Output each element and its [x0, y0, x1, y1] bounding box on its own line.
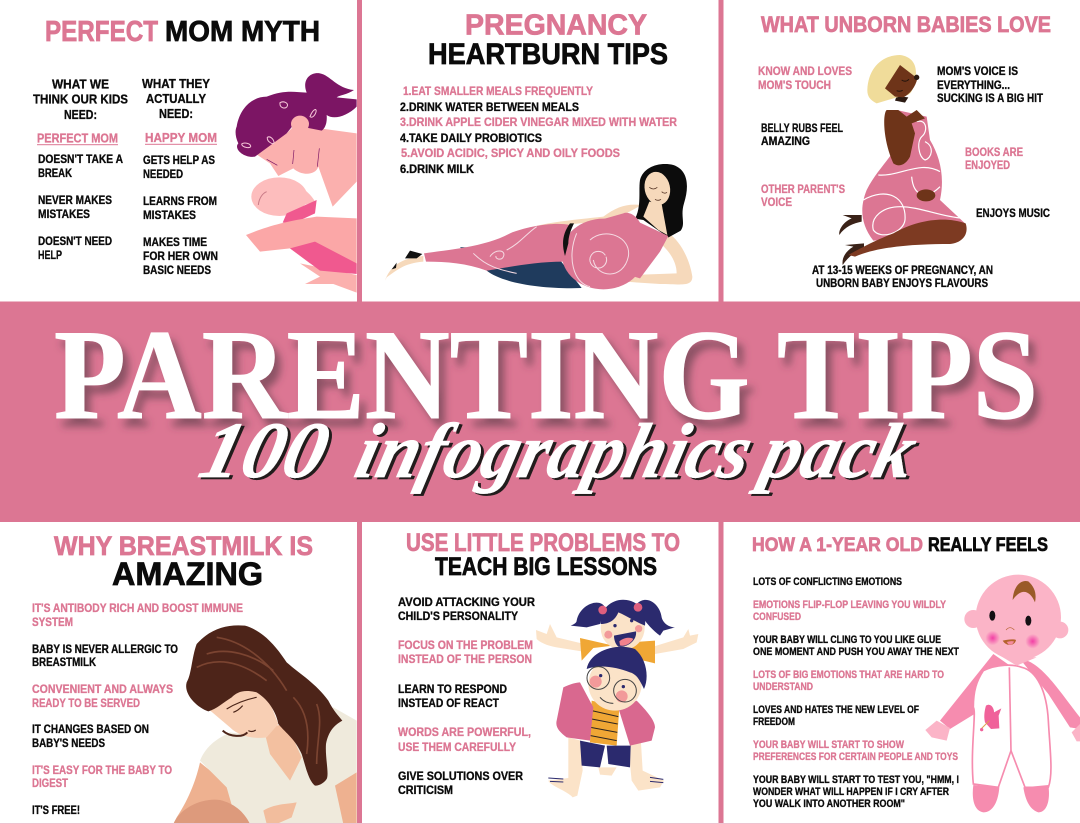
column heading: what we think: WHAT WE: [52, 76, 109, 92]
feeling: flip-flop: EMOTIONS FLIP-FLOP LEAVING YOU WILDLY: [753, 599, 946, 611]
list: happy mom traits: [143, 153, 218, 277]
illustration: baby in pink onesie: [925, 575, 1080, 812]
list: perfect mom traits: DOESN'T TAKE A: [38, 152, 123, 166]
heading: how a 1-year old really feels: [752, 534, 1048, 556]
tip: avoid attacking: CHILD'S PERSONALITY: [398, 609, 518, 623]
benefit: convenient: [32, 682, 173, 710]
feeling: freedom: FREEDOM: [753, 716, 795, 728]
heading: use little problems: [406, 529, 680, 581]
benefit: antibody rich: IT'S ANTIBODY RICH AND BOOST IMMUNE: [32, 601, 243, 615]
benefit: changes with needs: BABY'S NEEDS: [32, 736, 105, 750]
banner subtitle: pack: [748, 408, 925, 495]
benefit: easy to digest: [32, 763, 172, 790]
benefit: never allergic: BABY IS NEVER ALLERGIC TO: [32, 642, 178, 656]
feeling: flip-flop: CONFUSED: [753, 611, 801, 623]
tip: respond not react: INSTEAD OF REACT: [398, 696, 500, 710]
note: mom's touch: MOM'S TOUCH: [758, 78, 831, 92]
list: happy mom traits: NEEDED: [143, 167, 183, 181]
column heading: what we think: THINK OUR KIDS: [33, 92, 128, 106]
benefit: convenient: CONVENIENT AND ALWAYS: [32, 682, 173, 696]
note: mom's touch: [758, 64, 852, 92]
feeling: testing: YOU WALK INTO ANOTHER ROOM": [753, 798, 905, 810]
column heading: what they need: ACTUALLY: [146, 91, 206, 106]
note: flavours: [812, 263, 993, 290]
list: happy mom traits: MISTAKES: [143, 208, 196, 222]
banner subtitle: infographics: [348, 408, 761, 495]
list: happy mom traits: GETS HELP AS: [143, 153, 215, 167]
numbered tips list: 1.EAT SMALLER MEALS FREQUENTLY: [403, 84, 593, 98]
heading: how a 1-year old really feels: HOW A 1-YEAR OLD: [752, 534, 923, 556]
tip: solutions over criticism: GIVE SOLUTIONS OVER: [398, 769, 523, 783]
list: happy mom traits: MAKES TIME: [143, 235, 207, 249]
tip: words are powerful: WORDS ARE POWERFUL,: [398, 725, 531, 739]
feeling: preferences: YOUR BABY WILL START TO SHOW: [753, 739, 904, 751]
column heading: what they need: NEED:: [159, 106, 193, 121]
list: perfect mom traits: [38, 152, 123, 262]
note: other parent's voice: VOICE: [761, 195, 792, 209]
feeling: conflicting emotions: LOTS OF CONFLICTING EMOTIONS: [753, 576, 902, 588]
numbered tips list: 6.DRINK MILK: [400, 162, 474, 176]
feeling: cling like glue: [753, 634, 959, 658]
heading: how a 1-year old really feels: REALLY FEELS: [928, 534, 1048, 556]
feeling: big emotions: LOTS OF BIG EMOTIONS THAT ARE HARD TO: [753, 669, 944, 681]
feeling: preferences: PREFERENCES FOR CERTAIN PEOPLE AND TOYS: [753, 751, 958, 763]
column heading: what we think: NEED:: [64, 107, 97, 122]
heading: why breastmilk is amazing: [54, 531, 313, 592]
list: perfect mom traits: BREAK: [38, 166, 72, 180]
heading: why breastmilk is amazing: WHY BREASTMILK IS: [54, 531, 313, 561]
feeling: cling like glue: ONE MOMENT AND PUSH YOU AWAY THE NEXT: [753, 646, 959, 658]
benefit: free: IT'S FREE!: [32, 803, 80, 817]
panel: pregnancy heartburn tips: [362, 0, 718, 301]
heading: use little problems: TEACH BIG LESSONS: [435, 553, 657, 581]
heading: why breastmilk is amazing: AMAZING: [112, 556, 263, 592]
numbered tips list: 5.AVOID ACIDIC, SPICY AND OILY FOODS: [401, 146, 620, 160]
benefit: changes with needs: [32, 722, 149, 750]
note: flavours: AT 13-15 WEEKS OF PREGNANCY, AN: [812, 263, 993, 277]
list: perfect mom traits: MISTAKES: [38, 207, 90, 221]
note: mom's voice: MOM'S VOICE IS: [937, 64, 1018, 78]
panel: why breastmilk is amazing: [0, 522, 357, 824]
illustration: mother kissing baby: [236, 73, 357, 293]
benefit: antibody rich: [32, 601, 243, 629]
heading: pregnancy heartburn tips: [428, 10, 668, 71]
feeling: flip-flop: [753, 599, 946, 623]
note: mom's voice: EVERYTHING...: [937, 78, 1010, 92]
note: books: BOOKS ARE: [965, 145, 1023, 159]
numbered tips list: 4.TAKE DAILY PROBIOTICS: [400, 131, 542, 145]
note: belly rubs: BELLY RUBS FEEL: [761, 121, 843, 135]
feeling: big emotions: [753, 669, 944, 693]
feeling: testing: WONDER WHAT WILL HAPPEN IF I CRY AFTER: [753, 786, 949, 798]
numbered tips list: 3.DRINK APPLE CIDER VINEGAR MIXED WITH WATER: [400, 115, 677, 129]
banner subtitle: 100: [192, 406, 338, 495]
benefit: antibody rich: SYSTEM: [32, 615, 73, 629]
list: happy mom traits: BASIC NEEDS: [143, 263, 211, 277]
tip: words are powerful: [398, 725, 531, 754]
benefit: easy to digest: DIGEST: [32, 776, 69, 790]
tip: solutions over criticism: CRITICISM: [398, 783, 453, 797]
heading: perfect mom myth: MOM MYTH: [165, 16, 320, 48]
list: perfect mom traits: HELP: [38, 248, 62, 262]
illustration: mother breastfeeding: [173, 625, 357, 824]
tip: respond not react: [398, 682, 507, 710]
note: flavours: UNBORN BABY ENJOYS FLAVOURS: [816, 276, 988, 290]
feeling: big emotions: UNDERSTAND: [753, 681, 813, 693]
list: happy mom traits: FOR HER OWN: [143, 249, 218, 263]
tip: focus on the problem: FOCUS ON THE PROBLEM: [398, 638, 533, 652]
heading: pregnancy heartburn tips: HEARTBURN TIPS: [428, 38, 668, 71]
feeling: freedom: [753, 704, 919, 728]
tip: respond not react: LEARN TO RESPOND: [398, 682, 507, 696]
column heading: what we think: [33, 76, 128, 122]
note: other parent's voice: [761, 182, 845, 209]
numbered tips list: 2.DRINK WATER BETWEEN MEALS: [400, 100, 579, 114]
tip: words are powerful: USE THEM CAREFULLY: [398, 740, 516, 754]
column heading: what they need: WHAT THEY: [142, 76, 210, 91]
benefit: never allergic: BREASTMILK: [32, 655, 96, 669]
heading: perfect mom myth: PERFECT: [45, 16, 158, 48]
note: other parent's voice: OTHER PARENT'S: [761, 182, 845, 196]
panel: little problems big lessons: [362, 522, 718, 824]
subheading: happy mom: HAPPY MOM: [145, 130, 217, 145]
feeling: cling like glue: YOUR BABY WILL CLING TO YOU LIKE GLUE: [753, 634, 941, 646]
panel: what unborn babies love: [724, 0, 1080, 301]
list: perfect mom traits: NEVER MAKES: [38, 193, 112, 207]
banner subtitle: [192, 406, 925, 495]
feeling: freedom: LOVES AND HATES THE NEW LEVEL OF: [753, 704, 919, 716]
note: mom's voice: SUCKING IS A BIG HIT: [937, 91, 1044, 105]
benefit: convenient: READY TO BE SERVED: [32, 696, 140, 710]
note: mom's voice: [937, 64, 1044, 105]
list: perfect mom traits: DOESN'T NEED: [38, 234, 112, 248]
illustration: reclining pregnant woman: [385, 164, 692, 289]
heading: use little problems: USE LITTLE PROBLEMS TO: [406, 529, 680, 557]
note: books: [965, 145, 1023, 172]
numbered tips list: [400, 84, 677, 176]
tip: focus on the problem: INSTEAD OF THE PERSON: [398, 652, 532, 666]
illustration: children playing: [536, 600, 698, 797]
benefit: easy to digest: IT'S EASY FOR THE BABY TO: [32, 763, 172, 777]
heading: perfect mom myth: [45, 16, 320, 48]
tip: focus on the problem: [398, 638, 533, 666]
heading: pregnancy heartburn tips: PREGNANCY: [465, 10, 647, 42]
note: mom's touch: KNOW AND LOVES: [758, 64, 852, 78]
tip: avoid attacking: AVOID ATTACKING YOUR: [398, 595, 535, 609]
list: happy mom traits: LEARNS FROM: [143, 194, 217, 208]
column heading: what they need: [142, 76, 210, 121]
heading: what unborn babies love: WHAT UNBORN BABIES LOVE: [761, 12, 1051, 37]
note: books: ENJOYED: [965, 158, 1010, 172]
panel: how a 1-year old really feels: [724, 522, 1080, 824]
banner: parenting tips: [0, 302, 1080, 522]
panel: perfect mom myth: [0, 0, 357, 301]
subheading: perfect mom: PERFECT MOM: [37, 130, 118, 146]
benefit: changes with needs: IT CHANGES BASED ON: [32, 722, 149, 736]
note: music: ENJOYS MUSIC: [976, 206, 1050, 220]
feeling: testing: YOUR BABY WILL START TO TEST YOU, "HMM, I: [753, 774, 959, 786]
tip: avoid attacking: [398, 595, 535, 623]
feeling: preferences: [753, 739, 958, 763]
benefit: never allergic: [32, 642, 178, 669]
note: belly rubs: AMAZING: [761, 134, 810, 148]
tip: solutions over criticism: [398, 769, 523, 797]
feeling: testing: [753, 774, 959, 810]
illustration: seated pregnant woman: [839, 55, 967, 265]
note: belly rubs: [761, 121, 843, 148]
